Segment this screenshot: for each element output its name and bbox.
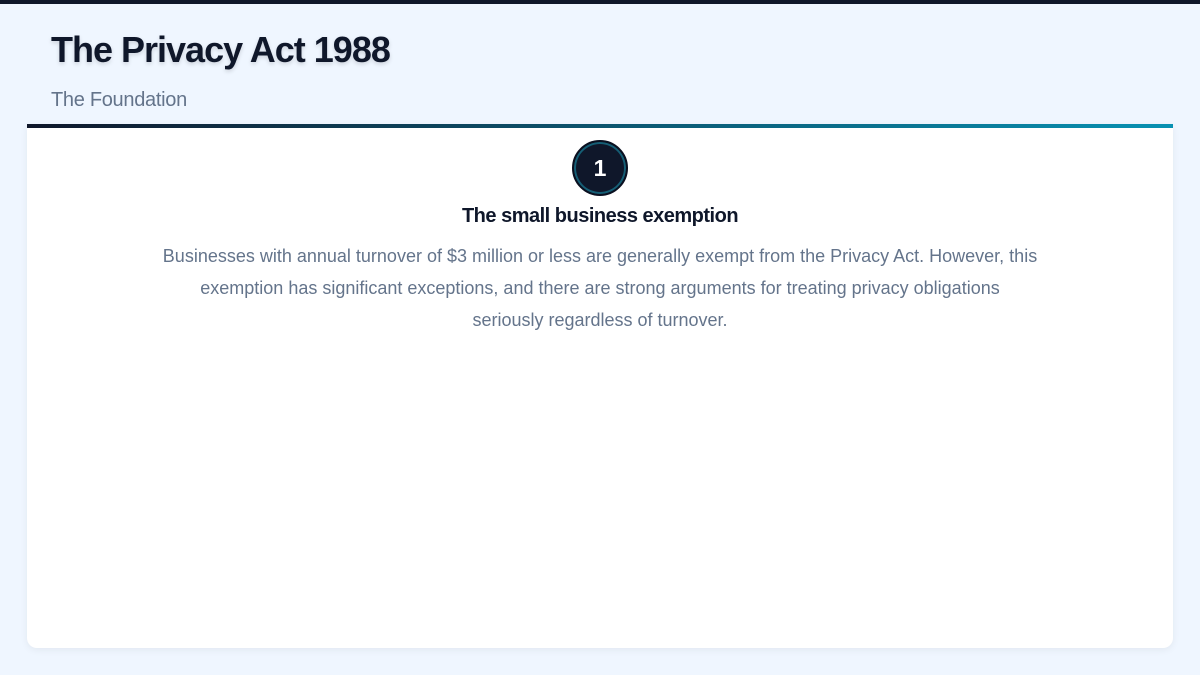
subtitle: The Foundation (51, 89, 187, 111)
heading: The small business exemption (462, 205, 738, 227)
text block: seriously regardless of turnover. (472, 310, 728, 330)
panel: small business exemption (27, 124, 1173, 648)
text block (163, 246, 1037, 330)
icon: number badge (572, 140, 628, 196)
icon: number badge: 1 (594, 155, 606, 181)
text block: exemption has significant exceptions, and there are strong arguments for treating privacy obligations (200, 278, 1000, 298)
text block: Businesses with annual turnover of $3 million or less are generally exempt from the Privacy Act. However, this (163, 246, 1037, 266)
title: The Privacy Act 1988 (51, 29, 390, 70)
